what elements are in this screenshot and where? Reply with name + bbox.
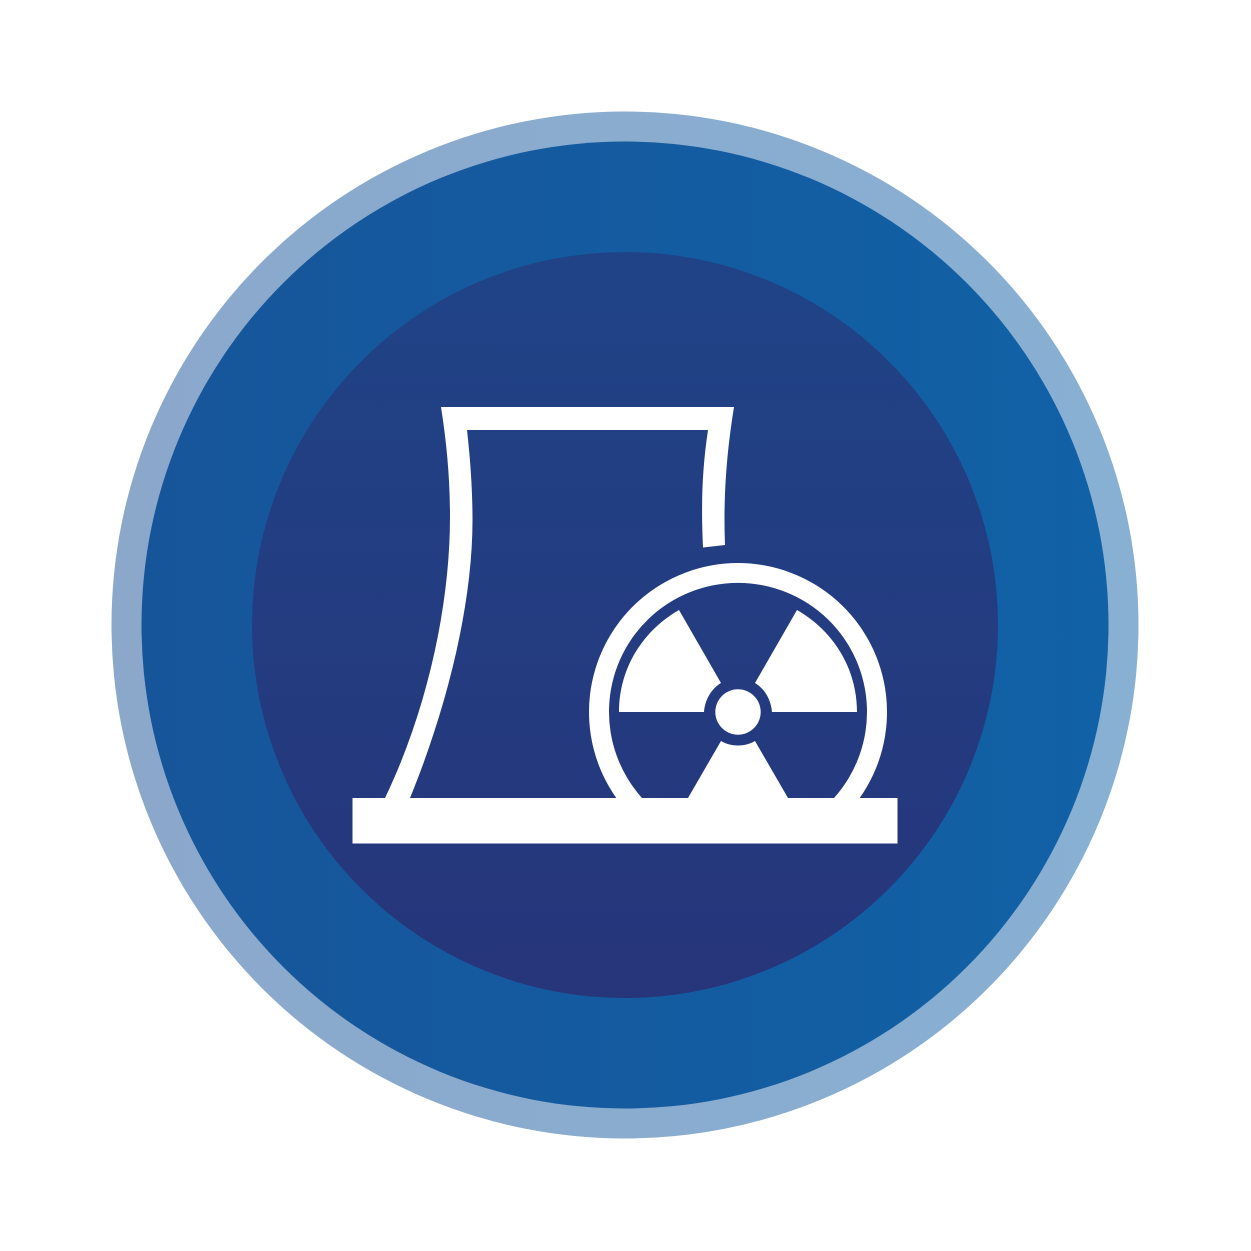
inner disc xyxy=(252,252,998,998)
icon: radiation bottom blade xyxy=(688,741,788,815)
icon: radiation top-right blade xyxy=(755,610,857,712)
outer ring xyxy=(112,112,1138,1138)
middle ring xyxy=(142,142,1108,1108)
icon: base platform xyxy=(352,798,898,844)
icon: radiation centre dot xyxy=(715,689,761,735)
icon: radiation symbol ring xyxy=(589,563,887,800)
icon: cooling tower outline xyxy=(384,407,734,800)
icon: radiation top-left blade xyxy=(619,610,721,712)
icon: cooling tower and radiation symbol xyxy=(352,407,898,844)
